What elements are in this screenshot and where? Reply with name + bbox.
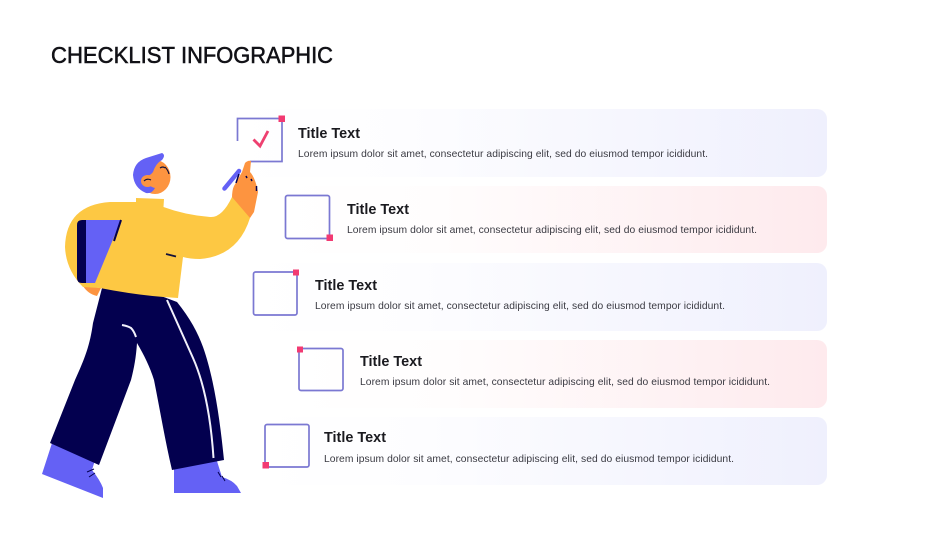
face marks [144,167,169,181]
icon: checkbox 4 [297,346,343,390]
text: row 1: Lorem ipsum dolor sit amet, consectetur adipiscing elit, sed do eiusmod tempor icididunt. [298,149,708,160]
title: INFOGRAPHIC [181,42,333,68]
ear [141,175,154,187]
left hand [83,286,101,296]
icon: checkbox 3 [254,270,299,315]
left shoe laces [87,469,95,477]
icon: checkbox 2 [286,196,333,241]
left shoe [42,440,103,498]
panel: row 2 [278,186,827,253]
panel: row 5 [258,417,827,485]
pocket line [122,325,136,337]
heading: row 4: Title Text [360,354,422,370]
text: row 2: Lorem ipsum dolor sit amet, consectetur adipiscing elit, sed do eiusmod tempor icididunt. [347,225,757,236]
panel: row 3 [248,263,827,331]
sleeve crease [166,254,176,256]
pencil [224,171,239,188]
trousers [50,288,224,470]
panel: row 4 [292,340,827,408]
book [85,220,121,283]
panel: row 1 [230,109,827,177]
illustration: person holding book and pencil [42,153,258,498]
head [140,160,170,194]
hand and finger [232,161,258,218]
title: CHECKLIST [51,42,175,68]
title [51,42,333,68]
icon: checkbox 5 [262,424,309,468]
text: row 3: Lorem ipsum dolor sit amet, consectetur adipiscing elit, sed do eiusmod tempor icididunt. [315,301,725,312]
sweater [65,197,250,298]
text: row 4: Lorem ipsum dolor sit amet, consectetur adipiscing elit, sed do eiusmod tempor icididunt. [360,377,770,388]
icon: checkbox 1 with check mark [238,116,285,162]
heading: row 1: Title Text [298,126,360,142]
heading: row 2: Title Text [347,202,409,218]
finger marks [236,174,256,191]
text: row 5: Lorem ipsum dolor sit amet, consectetur adipiscing elit, sed do eiusmod tempor icididunt. [324,454,734,465]
trouser stripe [167,300,214,458]
heading: row 5: Title Text [324,430,386,446]
heading: row 3: Title Text [315,278,377,294]
right shoe [174,458,241,493]
hair [133,153,164,193]
right shoe laces [218,472,225,481]
